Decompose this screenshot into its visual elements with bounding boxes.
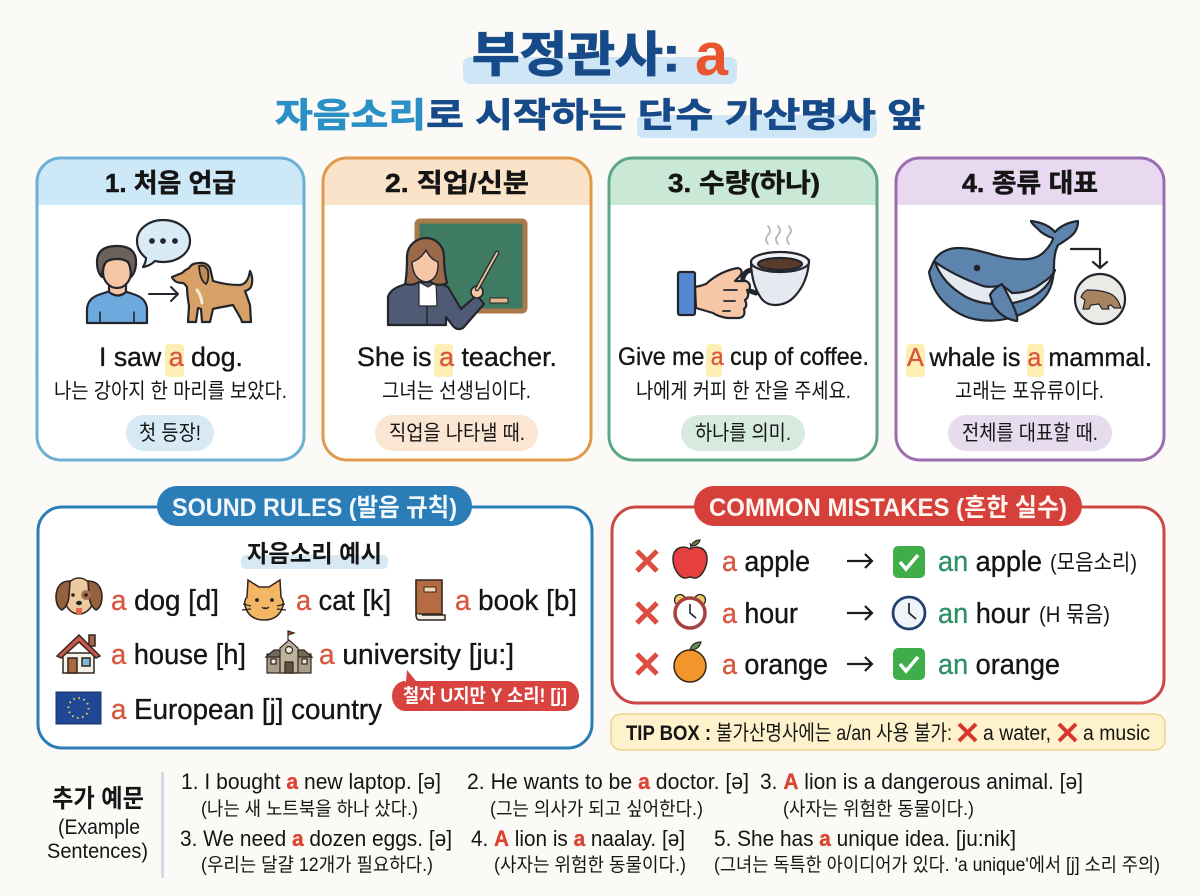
panel: 3. quantity <box>609 158 877 460</box>
icon: book <box>416 580 445 620</box>
section label: extra examples: 추가 예문 <box>52 785 144 813</box>
icon: teacher at chalkboard <box>388 221 525 329</box>
section label: extra examples: Sentences) <box>47 840 148 863</box>
tag <box>681 415 805 451</box>
callout: spelling note: 철자 U지만 Y 소리! [j] <box>403 685 567 707</box>
example 2: 2. He wants to be a doctor. [ə] <box>467 769 749 794</box>
heading: 4: 4. 종류 대표 <box>962 168 1098 198</box>
example 3 <box>760 769 1083 820</box>
example 5 <box>471 826 686 876</box>
heading: 1: 1. 처음 언급 <box>105 168 236 198</box>
tag: 직업을 나타낼 때. <box>389 422 525 445</box>
example sentences <box>180 769 1160 876</box>
sentence: I saw a dog. <box>99 342 243 372</box>
tag: 전체를 대표할 때. <box>962 422 1098 445</box>
row: a orange to an orange: an orange <box>938 649 1060 681</box>
example 5: 4. A lion is a naalay. [ə] <box>471 826 685 851</box>
heading pill: sound rules <box>157 486 472 526</box>
section label: extra examples: (Example <box>58 816 140 839</box>
sentence: Give me a cup of coffee. <box>618 343 869 371</box>
example 4: (우리는 달걀 12개가 필요하다.) <box>201 854 433 876</box>
example 6 <box>714 826 1160 876</box>
example 4 <box>180 826 452 876</box>
row: a apple to an apple: (모음소리) <box>1050 550 1137 575</box>
tip box <box>611 714 1165 750</box>
example 2: (그는 의사가 되고 싶어한다.) <box>490 798 703 820</box>
row 1: a book: a book [b] <box>455 585 577 617</box>
row: a hour to an hour: (H 묶음) <box>1039 602 1110 627</box>
icon: person talking about a dog <box>87 220 252 323</box>
panel: common mistakes <box>612 486 1164 703</box>
example 1: 1. I bought a new laptop. [ə] <box>181 769 441 794</box>
row: a hour to an hour <box>637 594 1110 630</box>
row 3: a European: a European [j] country <box>111 694 382 726</box>
example 4: 3. We need a dozen eggs. [ə] <box>180 826 452 851</box>
row: a orange to an orange: a orange <box>722 649 828 681</box>
title: a <box>695 21 729 88</box>
example 5: (사자는 위험한 동물이다.) <box>494 854 686 876</box>
example 2 <box>467 769 749 820</box>
row: a hour to an hour: an hour <box>938 598 1030 630</box>
example 6: (그녀는 독특한 아이디어가 있다. 'a unique'에서 [j] 소리 주의) <box>714 854 1160 876</box>
translation: 고래는 포유류이다. <box>955 380 1104 403</box>
row: a apple to an apple: a apple <box>722 546 810 578</box>
row: a apple to an apple: an apple <box>938 546 1042 578</box>
row 1: a dog: a dog [d] <box>111 585 219 617</box>
icon: house <box>57 635 100 673</box>
icon: EU flag <box>56 692 101 724</box>
tag: 첫 등장! <box>139 422 201 445</box>
callout: spelling note <box>392 670 579 711</box>
icon: cat face <box>242 580 286 620</box>
icon: university <box>266 631 312 673</box>
subheading: 자음소리 예시 <box>247 541 382 568</box>
row: a hour to an hour: a hour <box>722 598 798 630</box>
row 1: a cat: a cat [k] <box>296 585 391 617</box>
tag: 하나를 의미. <box>695 422 791 445</box>
icon: hand holding coffee cup <box>678 226 809 318</box>
example 3: 3. A lion is a dangerous animal. [ə] <box>760 769 1083 794</box>
heading: 3: 3. 수량(하나) <box>668 168 820 198</box>
sentence: A whale is a mammal. <box>907 342 1152 372</box>
heading: 2: 2. 직업/신분 <box>385 168 529 198</box>
heading pill: common mistakes <box>694 486 1082 526</box>
panel: 1. first mention <box>37 158 304 460</box>
subtitle: 자음소리 로 시작하는 단수 가산명사 앞 <box>275 97 925 135</box>
example 1 <box>181 769 441 820</box>
panel: 4. representing a kind <box>896 158 1164 460</box>
translation: 나에게 커피 한 잔을 주세요. <box>636 380 851 403</box>
tip box: a water, <box>983 722 1051 745</box>
heading pill: sound rules: SOUND RULES (발음 규칙) <box>172 494 457 522</box>
sentence: She is a teacher. <box>357 342 557 372</box>
example 1: (나는 새 노트북을 하나 샀다.) <box>201 798 418 820</box>
translation: 나는 강아지 한 마리를 보았다. <box>54 380 287 403</box>
title <box>463 21 737 88</box>
example 6: 5. She has a unique idea. [ju:nik] <box>714 826 1016 851</box>
example 3: (사자는 위험한 동물이다.) <box>783 798 974 820</box>
tag <box>126 415 214 451</box>
row: a orange to an orange <box>637 642 1060 682</box>
panel: sound rules <box>38 486 592 748</box>
translation: 그녀는 선생님이다. <box>382 380 531 403</box>
row 2: a university: a university [ju:] <box>319 639 514 671</box>
row 2: a house: a house [h] <box>111 639 246 671</box>
row: a apple to an apple <box>637 540 1137 578</box>
tip box: TIP BOX : <box>626 722 711 745</box>
icon: dog face <box>56 578 102 615</box>
tip box: 불가산명사에는 a/an 사용 불가: <box>716 722 952 745</box>
heading pill: common mistakes: COMMON MISTAKES (흔한 실수) <box>709 494 1067 522</box>
tag <box>375 415 538 451</box>
icon: whale and bear <box>929 221 1125 324</box>
tag <box>948 415 1112 451</box>
tip box: a music <box>1083 722 1150 745</box>
panel: 2. occupation <box>323 158 591 460</box>
section label: extra examples <box>47 785 148 863</box>
title: 부정관사: <box>472 29 680 82</box>
